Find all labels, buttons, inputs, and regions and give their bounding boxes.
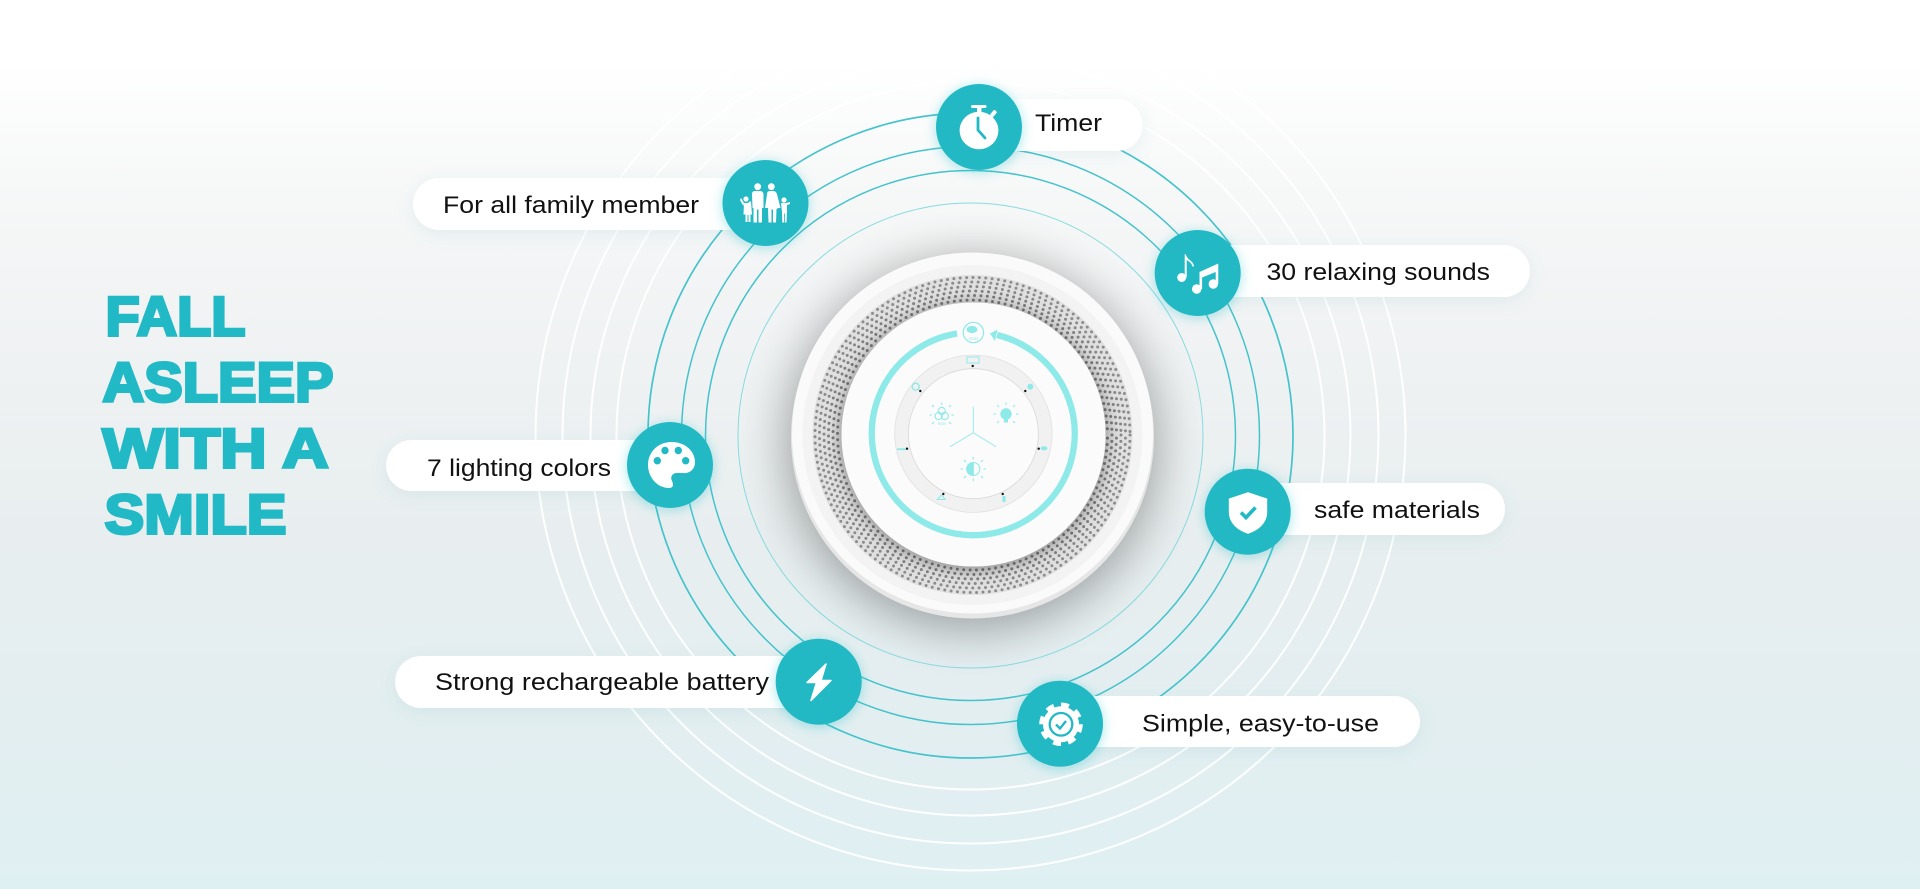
icon: RGB light xyxy=(930,402,954,426)
icon: stopwatch xyxy=(936,84,1022,170)
icon: bolt xyxy=(776,639,862,725)
label: 7 lighting colors xyxy=(427,455,611,482)
selector dots xyxy=(906,365,1040,495)
label: For all family member xyxy=(443,192,699,219)
outer white disc xyxy=(792,252,1153,614)
panel: For all family member xyxy=(413,160,808,246)
pill xyxy=(395,656,819,708)
panel: Timer xyxy=(936,84,1143,170)
pill xyxy=(1198,245,1530,297)
pill xyxy=(1248,483,1505,535)
speaker grille xyxy=(812,275,1132,595)
title: FALL xyxy=(106,284,246,348)
label: Timer xyxy=(1035,110,1102,137)
label: Strong rechargeable battery xyxy=(435,669,770,696)
RGB mode icon xyxy=(963,322,984,343)
RGB mode icon: RGB xyxy=(969,336,978,341)
pill xyxy=(386,440,670,491)
pill xyxy=(413,178,765,230)
panel: 7 lighting colors xyxy=(386,422,713,508)
icon: bulb xyxy=(994,402,1018,423)
panel: 30 relaxing sounds xyxy=(1155,230,1530,316)
icon: music notes xyxy=(1155,230,1241,316)
cyan ring arrow xyxy=(872,330,1075,535)
Y divider lines xyxy=(950,407,996,447)
panel: Strong rechargeable battery xyxy=(395,639,862,725)
device rim xyxy=(791,256,1154,618)
selector mode icons xyxy=(897,357,1048,502)
title: WITH A xyxy=(102,416,328,480)
pill xyxy=(1060,696,1420,747)
selector ring xyxy=(895,355,1052,512)
icon: gear xyxy=(1017,681,1103,767)
icon: shield xyxy=(1205,469,1291,555)
icon: family xyxy=(722,160,808,246)
icon: half sun xyxy=(960,457,986,481)
icon: palette xyxy=(627,422,713,508)
speaker device xyxy=(784,252,1160,632)
icon: RGB light: RGB xyxy=(938,422,946,426)
panel: Simple, easy-to-use xyxy=(1017,681,1420,767)
top control disc xyxy=(842,302,1106,566)
concentric orbit rings xyxy=(536,0,1406,870)
title xyxy=(102,284,334,546)
panel: safe materials xyxy=(1205,469,1505,555)
title: ASLEEP xyxy=(102,350,334,414)
pill xyxy=(979,99,1143,151)
label: Simple, easy-to-use xyxy=(1142,710,1379,738)
label: safe materials xyxy=(1314,497,1480,524)
label: 30 relaxing sounds xyxy=(1266,259,1490,286)
title: SMILE xyxy=(104,482,286,546)
device shadow xyxy=(784,256,1160,632)
inner bevel xyxy=(802,265,1142,605)
